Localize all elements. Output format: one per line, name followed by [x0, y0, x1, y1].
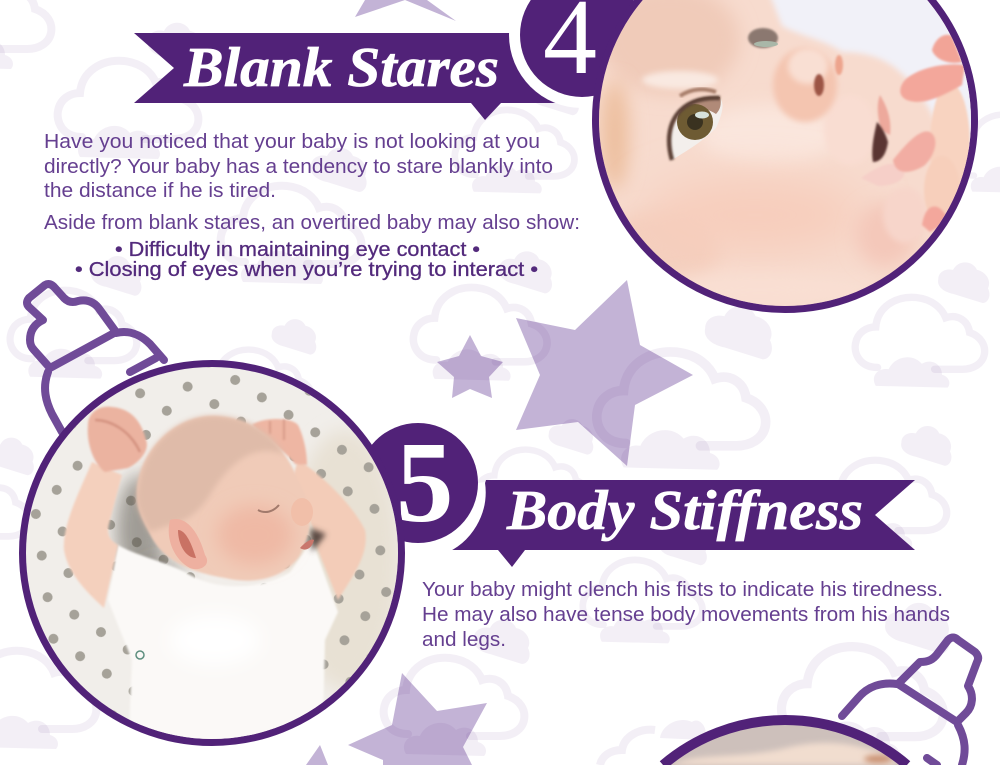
banner: Body Stiffness	[442, 480, 915, 567]
head	[137, 416, 310, 581]
bullet list: • Difficulty in maintaining eye contact •	[115, 238, 480, 261]
hair	[137, 416, 285, 532]
text block: Blank Stares body	[44, 130, 580, 281]
number badge 4	[509, 0, 655, 108]
photo: bottom partial	[663, 720, 907, 765]
mouth	[878, 95, 890, 135]
photo: sleeping newborn	[20, 360, 410, 760]
mouth	[300, 539, 314, 550]
star: bottom small	[306, 745, 328, 765]
text block: Body Stiffness body: Your baby might clench his fists to indicate his tiredness.	[422, 578, 943, 601]
text block: Body Stiffness body	[422, 578, 950, 651]
far eye	[748, 28, 778, 48]
eye	[669, 89, 723, 160]
hands	[88, 407, 307, 472]
number badge 5: 5	[396, 419, 454, 546]
banner: Blank Stares	[134, 33, 556, 120]
ear	[169, 519, 207, 569]
text block: Body Stiffness body: He may also have tense body movements from his hands	[422, 603, 950, 626]
star: large centre	[516, 280, 693, 466]
text block: Blank Stares body: directly? Your baby has a tendency to stare blankly into	[44, 155, 553, 178]
star: small centre	[437, 335, 503, 398]
heading: Body Stiffness: Body Stiffness	[506, 480, 863, 542]
text block: Blank Stares body: the distance if he is tired.	[44, 179, 276, 202]
icon: baby bottle bottom right	[842, 638, 978, 765]
nose	[773, 48, 837, 122]
shadow under head	[116, 475, 164, 585]
number badge 5	[358, 419, 479, 548]
heading: Blank Stares: Blank Stares	[183, 37, 499, 99]
nose	[291, 498, 313, 526]
background	[770, 0, 971, 152]
stars	[306, 0, 693, 765]
bullet list: • Closing of eyes when you’re trying to interact •	[75, 258, 538, 281]
star: top partial	[355, 0, 456, 21]
chin shadow	[310, 528, 326, 552]
bullet list	[75, 238, 538, 281]
arms	[64, 462, 122, 608]
cheek	[705, 106, 825, 160]
text block: Blank Stares body: Aside from blank stares, an overtired baby may also show:	[44, 211, 580, 234]
onesie	[108, 544, 338, 739]
text block: Body Stiffness body: and legs.	[422, 628, 506, 651]
fingers and hand	[893, 35, 970, 232]
icon: baby bottle top left	[27, 284, 164, 432]
photo: baby face looking up	[590, 0, 990, 310]
closed eye	[258, 505, 279, 512]
star: bottom large	[348, 673, 487, 765]
text block: Blank Stares body: Have you noticed that your baby is not looking at you	[44, 130, 540, 153]
